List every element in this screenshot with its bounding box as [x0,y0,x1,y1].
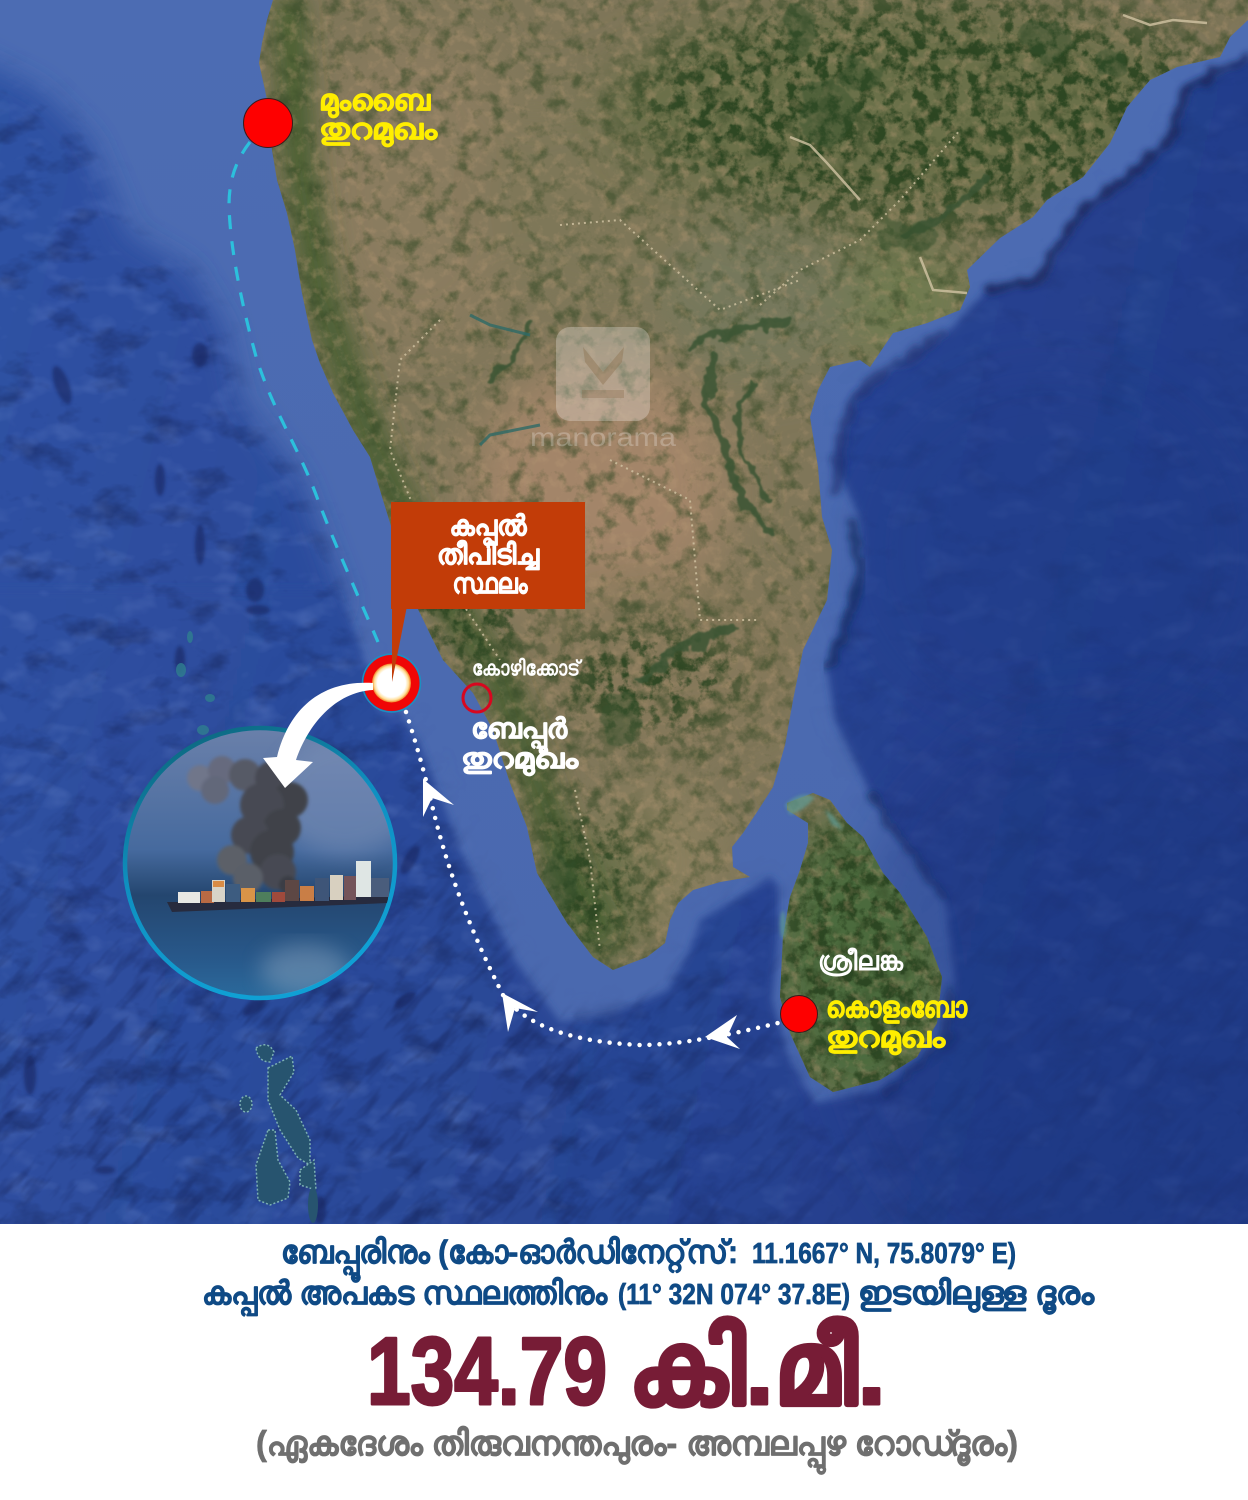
headline distance: കി.മീ. [628,1311,886,1427]
headline distance: 134.79 [367,1318,607,1425]
dark seamount streaks [24,343,423,1224]
label: Mumbai port [319,85,438,148]
callout: ship caught fire location: കപ്പൽ [450,510,527,546]
route: Mumbai dashed line [229,142,378,642]
dark green hill ranges [490,180,985,680]
distance description [202,1234,1095,1316]
label: Colombo port [826,992,968,1056]
label: Mumbai port: മുംബൈ [319,85,431,119]
label: Beypore port: ബേപ്പൂർ [471,713,568,756]
marker: Kozhikode / Beypore [463,684,491,712]
bottom info panel [0,1224,1248,1500]
callout: ship caught fire location: സ്ഥലം [452,568,529,599]
distance description: ഇടയിലുള്ള ദൂരം [858,1275,1095,1315]
route: Colombo dotted line [406,712,782,1045]
label: Beypore port: തുറമുഖം [461,743,579,776]
marker: Mumbai port [244,98,292,148]
label: Kozhikode: കോഴിക്കോട് [472,656,583,680]
label: Sri Lanka: ശ്രീലങ്ക [818,946,904,977]
inset photo: burning container ship [125,728,415,998]
road distance note: (ഏകദേശം തിരുവനന്തപുരം- അമ്പലപ്പുഴ റോഡ്ദൂരം) [256,1425,1018,1475]
containers [178,861,389,903]
callout: ship caught fire location [391,502,585,682]
watermark: manorama [530,327,677,452]
distance description: കപ്പൽ അപകട സ്ഥലത്തിനും [202,1275,608,1316]
label: Colombo port: തുറമുഖം [826,1022,946,1056]
watermark: manorama: manorama [530,422,677,452]
label: Colombo port: കൊളംബോ [826,992,968,1024]
white curved arrow to inset [263,683,373,788]
islands: Maldives [240,1045,318,1223]
rivers and settlements [390,15,1207,950]
islands: Lakshadweep [176,631,215,735]
landmass: India and Sri Lanka [240,0,1248,1110]
smoke plume [187,756,308,894]
arrow heads on route [423,779,740,1049]
distance description: 11.1667° N, 75.8079° E) [752,1238,1016,1270]
marker: Colombo port [780,996,818,1032]
distance description: ബേപ്പൂരിനും (കോ-ഓർഡിനേറ്റ്‌സ്: [281,1234,738,1284]
ship hull [167,895,388,912]
distance description: (11° 32N 074° 37.8E) [618,1279,850,1311]
lagoon tint, northern Sri Lanka [780,795,843,939]
callout: ship caught fire location: തീപിടിച്ച [437,539,540,571]
label: Beypore port [461,713,579,776]
label: Mumbai port: തുറമുഖം [319,114,438,148]
headline distance [367,1311,886,1427]
marker: ship fire location [362,654,420,712]
